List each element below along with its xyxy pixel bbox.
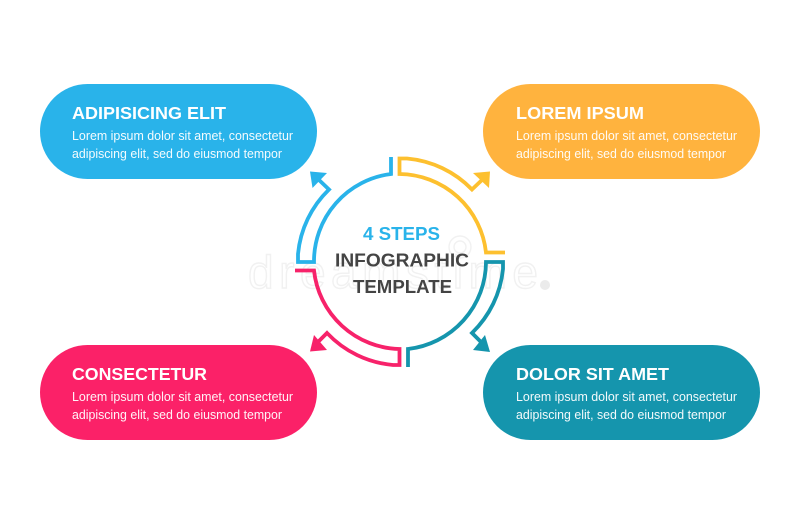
- panel: dolor sit amet: [483, 345, 760, 440]
- arrow: blue: [298, 157, 391, 262]
- panel: adipisicing elit: adipiscing elit, sed do eiusmod tempor: [72, 147, 282, 161]
- center title: TEMPLATE: [353, 276, 452, 297]
- panel: adipisicing elit: ADIPISICING ELIT: [72, 103, 226, 123]
- panel: adipisicing elit: [40, 84, 317, 179]
- center title: 4 STEPS: [363, 223, 440, 244]
- panel: lorem ipsum: [483, 84, 760, 179]
- center title: INFOGRAPHIC: [335, 250, 469, 270]
- panel: lorem ipsum: adipiscing elit, sed do eiusmod tempor: [516, 147, 726, 161]
- panel: consectetur: CONSECTETUR: [72, 364, 207, 384]
- panel: consectetur: [40, 345, 317, 440]
- panel: consectetur: adipiscing elit, sed do eiusmod tempor: [72, 408, 282, 422]
- watermark: dreamstime: [248, 246, 538, 298]
- panel: dolor sit amet: adipiscing elit, sed do eiusmod tempor: [516, 408, 726, 422]
- arrow: yellow: [400, 158, 505, 252]
- arrow: pink: [295, 270, 400, 365]
- panel: dolor sit amet: Lorem ipsum dolor sit amet, consectetur: [516, 390, 737, 404]
- panel: lorem ipsum: Lorem ipsum dolor sit amet, consectetur: [516, 129, 737, 143]
- panel: adipisicing elit: Lorem ipsum dolor sit amet, consectetur: [72, 129, 293, 143]
- center title: [335, 223, 469, 297]
- panel: dolor sit amet: DOLOR SIT AMET: [516, 364, 669, 384]
- panel: lorem ipsum: LOREM IPSUM: [516, 103, 644, 123]
- panel: consectetur: Lorem ipsum dolor sit amet, consectetur: [72, 390, 293, 404]
- arrow: teal: [408, 262, 503, 367]
